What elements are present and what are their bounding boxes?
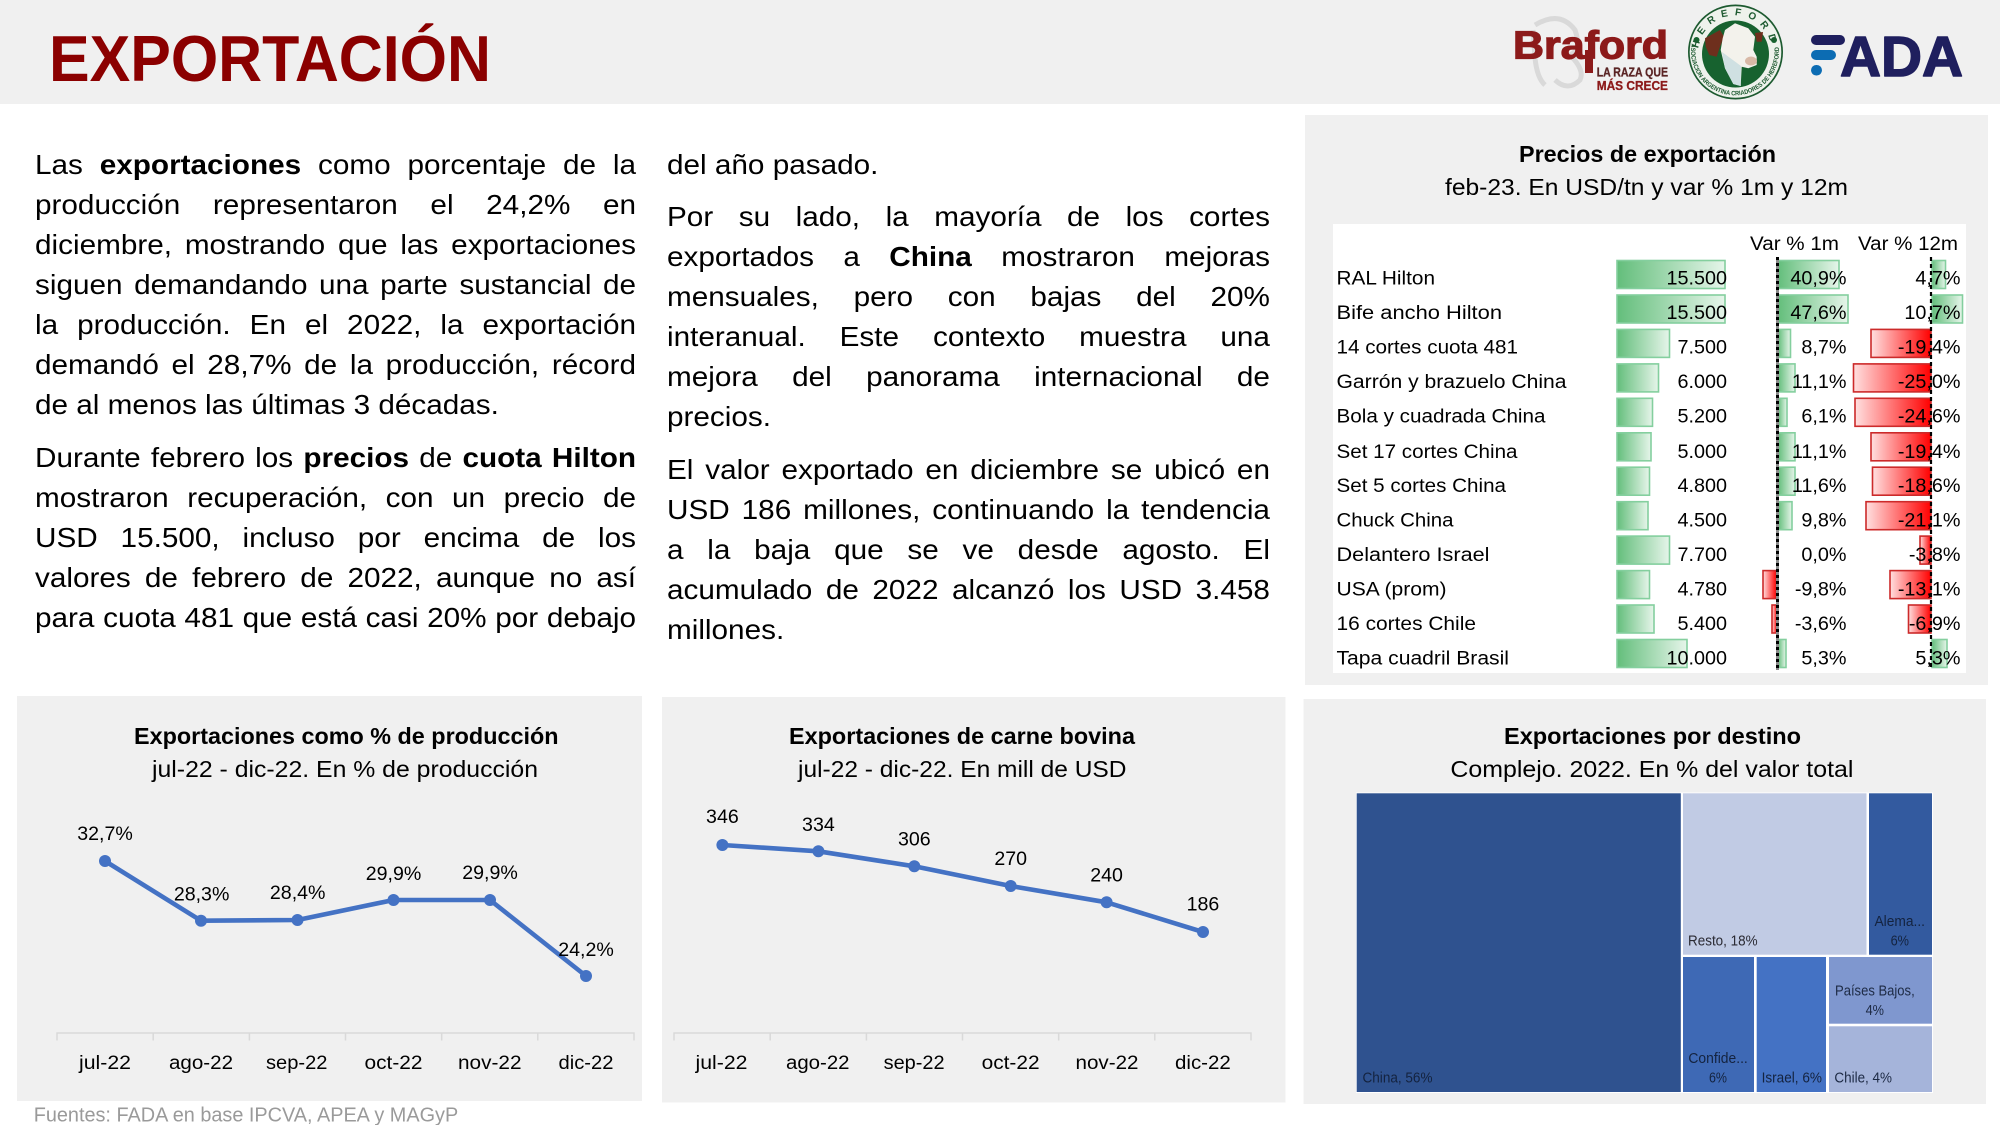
category labels: ago-22 [786,1052,850,1074]
cell: Países Bajos: 4% [1866,1003,1884,1019]
data labels: 24,2% [558,939,614,961]
text column 1 [34,149,636,633]
subheading: Complejo. 2022. En % del valor total [1450,756,1853,782]
subheading: feb-23. En USD/tn y var % 1m y 12m [1445,174,1848,200]
row: Chuck China: Chuck China [1336,510,1454,532]
paragraph: valor exportado: a la baja que se ve desde agosto. El [667,534,1270,565]
paragraph: cortes China [667,201,1270,432]
row: USA (prom): 4.780 [1677,579,1727,601]
cell: Alemania: Alema... [1874,914,1925,930]
header band [0,0,2000,104]
category labels: oct-22 [982,1052,1040,1074]
data labels: 270 [994,848,1027,870]
cell: Alemania: 6% [1891,934,1909,950]
row: Set 17 cortes China: Set 17 cortes China [1336,441,1518,463]
row: Set 17 cortes China: -19,4% [1898,441,1960,463]
paragraph: exportaciones: Las exportaciones como porcentaje de la [34,149,636,180]
paragraph: exportaciones: de al menos las últimas 3 décadas. [34,389,498,420]
row: Garrón y brazuelo China: 11,1% [1792,371,1846,393]
row: Set 5 cortes China: Set 5 cortes China [1336,475,1506,497]
panel: precios de exportación [1305,115,1988,685]
row: Bola y cuadrada China: 5.200 [1677,406,1727,428]
data labels: 29,9% [462,862,518,884]
row: Delantero Israel: -3,8% [1909,544,1960,566]
row: Delantero Israel: 7.700 [1677,544,1727,566]
cell: Chile: Chile, 4% [1834,1071,1892,1087]
row: Garrón y brazuelo China [1336,364,1960,393]
row: Tapa cuadril Brasil: 5,3% [1915,648,1960,670]
row: Garrón y brazuelo China: Garrón y brazuelo China [1336,371,1567,393]
logo: Braford [1513,19,1668,93]
paragraph: exportaciones [34,149,636,420]
row: Tapa cuadril Brasil: 5,3% [1801,648,1846,670]
paragraph: exportaciones: diciembre, mostrando que las exportaciones [34,229,636,260]
row: USA (prom) [1336,571,1960,601]
category labels: dic-22 [1175,1052,1231,1074]
paragraph: cortes China: mejora del panorama internacional de [667,361,1270,392]
paragraph: cortes China: interanual. Este contexto muestra una [667,321,1270,352]
row: RAL Hilton: 40,9% [1790,268,1846,290]
data labels: 306 [898,829,931,851]
paragraph: cortes China: mensuales, pero con bajas del 20% [667,281,1270,312]
row: Set 17 cortes China: 11,1% [1792,441,1846,463]
row: Set 17 cortes China [1336,433,1960,463]
row: Tapa cuadril Brasil [1336,640,1960,670]
paragraph: cortes China: Por su lado, la mayoría de los cortes [667,201,1270,232]
row: Delantero Israel [1336,536,1960,566]
cell: Resto [1683,793,1866,955]
row: Tapa cuadril Brasil: Tapa cuadril Brasil [1336,648,1509,670]
cell: Confidencial [1683,957,1754,1092]
category labels [694,1052,1231,1074]
treemap [1356,792,1933,1093]
category labels: jul-22 [78,1052,131,1074]
line series [99,855,592,982]
paragraph: precios cuota Hilton: Durante febrero los precios de cuota Hilton [34,442,636,473]
row: 14 cortes cuota 481 [1336,329,1960,359]
cell: Chile [1829,1026,1932,1092]
row: Bola y cuadrada China: -24,6% [1898,406,1960,428]
cell: Países Bajos [1829,957,1932,1024]
category labels: dic-22 [558,1052,614,1074]
column header: var 1m: Var % 1m [1750,233,1839,255]
paragraph: precios cuota Hilton: USD 15.500, incluso por encima de los [34,522,636,553]
row: USA (prom): -13,1% [1898,579,1960,601]
paragraph: precios cuota Hilton: mostraron recuperación, con un precio de [34,482,636,513]
subheading: jul-22 - dic-22. En mill de USD [797,756,1126,782]
data labels: 32,7% [77,823,133,845]
row: Chuck China [1336,502,1960,532]
data labels: 28,3% [174,884,229,906]
category labels: sep-22 [266,1052,328,1074]
axis [674,1033,1251,1040]
paragraph: exportaciones: demandó el 28,7% de la producción, récord [34,349,636,380]
category labels: ago-22 [169,1052,233,1074]
row: Bife ancho Hilton: 10,7% [1904,302,1960,324]
row: Chuck China: 9,8% [1801,510,1846,532]
paragraph: precios cuota Hilton: valores de febrero de 2022, aunque no así [34,562,636,593]
cell: Alemania [1869,793,1932,955]
axis [57,1033,634,1040]
paragraph: valor exportado: millones. [667,614,784,645]
row: Set 5 cortes China: 4.800 [1677,475,1727,497]
row: Bife ancho Hilton: 15.500 [1666,302,1727,324]
category labels: nov-22 [458,1052,522,1074]
category labels: oct-22 [364,1052,422,1074]
data labels: 29,9% [366,863,421,885]
row: RAL Hilton: 15.500 [1666,268,1727,290]
row: 16 cortes Chile: 5.400 [1677,613,1727,635]
category labels: sep-22 [884,1052,945,1074]
row: Garrón y brazuelo China: 6.000 [1677,371,1727,393]
logo: FADA: ADA [1840,25,1963,89]
paragraph: valor exportado: USD 186 millones, continuando la tendencia [667,494,1270,524]
logo: Hereford seal: ASOCIACION ARGENTINA CRIADORES DE HEREFORD [1691,44,1780,96]
text column 2: precios. [667,401,771,432]
data labels: 186 [1187,894,1219,916]
row: 16 cortes Chile [1336,605,1960,635]
row: RAL Hilton: RAL Hilton [1336,268,1435,290]
row: Delantero Israel: Delantero Israel [1336,544,1490,566]
heading: Exportaciones por destino [1504,723,1801,749]
row: Tapa cuadril Brasil: 10.000 [1666,648,1727,670]
heading: Exportaciones como % de producción [134,723,558,749]
logo: Braford: MÁS CRECE [1597,78,1668,93]
data labels: 28,4% [270,882,325,904]
row: Set 17 cortes China: 5.000 [1677,441,1727,463]
category labels [78,1052,613,1074]
row: 14 cortes cuota 481: 8,7% [1801,337,1846,359]
paragraph: exportaciones: producción representaron el 24,2% en [34,189,636,220]
data labels [77,823,614,961]
row: USA (prom): -9,8% [1795,579,1846,601]
logo: Hereford seal: HEREFORD [1692,8,1776,48]
row: Bife ancho Hilton: Bife ancho Hilton [1336,302,1502,324]
row: 14 cortes cuota 481: -19,4% [1898,337,1960,359]
paragraph: cortes China: exportados a China mostraron mejoras [667,241,1270,272]
row: Bife ancho Hilton [1336,295,1962,324]
data labels: 334 [802,814,835,836]
row: RAL Hilton: 4,7% [1915,268,1960,290]
row: Bola y cuadrada China: Bola y cuadrada China [1336,406,1546,428]
title: EXPORTACIÓN [49,22,491,95]
row: Set 5 cortes China: -18,6% [1898,475,1960,497]
row: Set 5 cortes China: 11,6% [1792,475,1846,497]
row: Bife ancho Hilton: 47,6% [1790,302,1846,324]
line series [716,839,1209,938]
row: Bola y cuadrada China [1336,398,1960,428]
data labels: 346 [706,806,739,828]
panel: exportaciones como % de producción [17,696,642,1101]
logo: Braford: LA RAZA QUE [1597,66,1668,80]
heading: Exportaciones de carne bovina [789,723,1135,749]
logo: Hereford seal [1688,4,1783,100]
paragraph: continuación: del año pasado. [667,149,878,180]
row: 14 cortes cuota 481: 7.500 [1677,337,1727,359]
paragraph: valor exportado [667,454,1270,645]
heading: Precios de exportación [1519,141,1776,167]
table background [1333,224,1966,673]
row: 16 cortes Chile: -3,6% [1795,613,1846,635]
cell: Países Bajos: Países Bajos, [1835,984,1915,1000]
row: 14 cortes cuota 481: 14 cortes cuota 481 [1336,337,1518,359]
category labels: nov-22 [1076,1052,1138,1074]
paragraph: exportaciones: siguen demandando una parte sustancial de [34,269,636,300]
row: Chuck China: -21,1% [1898,510,1960,532]
data labels [706,806,1219,916]
row: RAL Hilton [1336,260,1960,290]
row: Chuck China: 4.500 [1677,510,1727,532]
paragraph: precios cuota Hilton [34,442,636,633]
paragraph: exportaciones: la producción. En el 2022, la exportación [34,309,636,340]
paragraph: precios cuota Hilton: para cuota 481 que está casi 20% por debajo [34,602,636,633]
row: 16 cortes Chile: -6,9% [1909,613,1960,635]
cell: China [1357,793,1681,1092]
cell: Confidencial: 6% [1709,1071,1727,1087]
row: Delantero Israel: 0,0% [1801,544,1846,566]
row: USA (prom): USA (prom) [1336,579,1446,601]
paragraph: valor exportado: El valor exportado en diciembre se ubicó en [667,454,1270,485]
data labels: 240 [1090,865,1123,887]
text column 2 [667,149,1270,645]
cell: China: China, 56% [1362,1071,1433,1087]
row: Bola y cuadrada China: 6,1% [1801,406,1846,428]
panel: exportaciones por destino [1304,699,1986,1104]
category labels: jul-22 [694,1052,748,1074]
cell: Confidencial: Confide... [1688,1051,1748,1067]
row: Set 5 cortes China [1336,467,1960,497]
cell: Israel [1757,957,1826,1092]
cell: Israel: Israel, 6% [1762,1071,1822,1087]
panel: exportaciones de carne bovina [662,697,1286,1102]
row: 16 cortes Chile: 16 cortes Chile [1336,613,1476,635]
logo: Braford: Braford [1513,24,1668,67]
cell: Resto: Resto, 18% [1688,934,1758,950]
subheading: jul-22 - dic-22. En % de producción [151,756,538,782]
paragraph: valor exportado: acumulado de 2022 alcanzó los USD 3.458 [667,574,1270,604]
row: Garrón y brazuelo China: -25,0% [1898,371,1960,393]
column header: var 12m: Var % 12m [1858,233,1958,255]
